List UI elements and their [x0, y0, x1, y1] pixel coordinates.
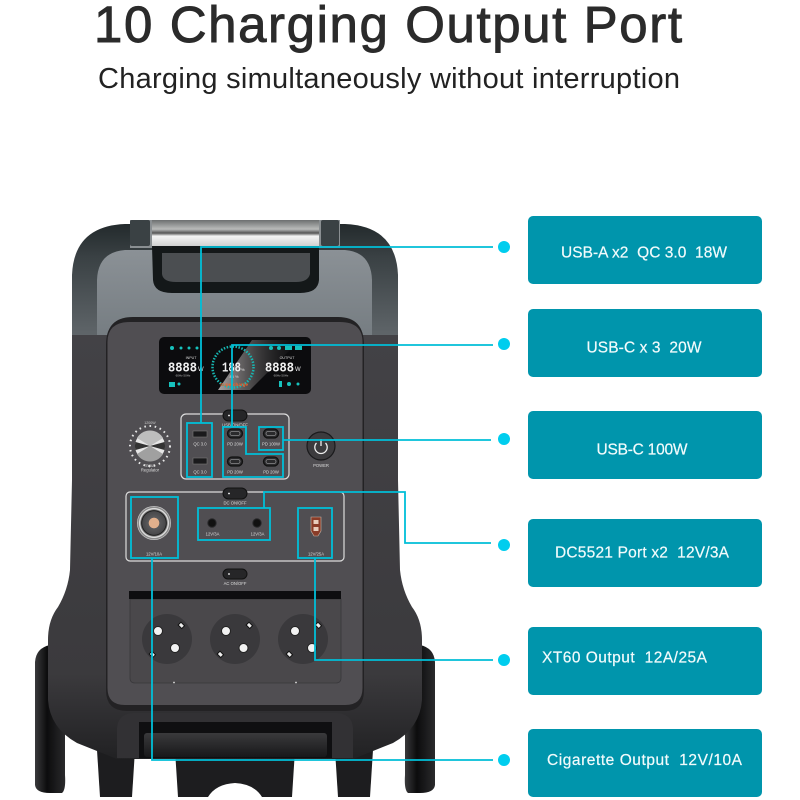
card: DC5521: DC5521 Port x2 12V/3A: [555, 544, 730, 562]
card: USB-C x3: [528, 309, 762, 377]
LCD display: [159, 337, 311, 394]
card: USB-A: USB-A x2 QC 3.0 18W: [561, 244, 727, 262]
card: USB-C 100W: [528, 411, 762, 479]
lower body: [48, 330, 422, 759]
socket 1: [142, 614, 192, 664]
USB port group: PD 20W: [227, 470, 243, 474]
connector: USB-C 100W: [283, 439, 491, 441]
top shell light grey: [97, 250, 372, 335]
connector box: USB-C 100W: [259, 427, 283, 450]
DC port group: [126, 488, 344, 561]
USB port group: USB ON/OFF: [222, 422, 248, 428]
card: USB-C 100W: USB-C 100W: [596, 442, 688, 458]
connector: XT60: [315, 558, 493, 660]
USB port group: QC 3.0: [193, 442, 207, 446]
connector box: XT60: [298, 508, 332, 558]
input regulator knob: 1200W: [144, 421, 156, 425]
DC port group: 12V/3A: [206, 532, 220, 536]
LCD display: 8888: [265, 360, 294, 376]
power button: [307, 432, 335, 468]
USB port group: PD 100W: [262, 442, 280, 446]
carry handle: [130, 220, 340, 293]
DC port group: 12V/3A: [251, 532, 265, 536]
bottom handle: [117, 713, 353, 758]
LCD display: 88 %: [229, 374, 239, 379]
connector box: DC5521: [198, 508, 270, 540]
LCD display: OUTPUT: [280, 356, 295, 360]
power station device: [35, 220, 435, 797]
AC outlet panel: [129, 591, 341, 683]
AC switch: [223, 569, 247, 586]
connector: DC5521: [264, 492, 491, 543]
socket 3: [278, 614, 328, 664]
card: DC5521: [528, 519, 762, 587]
USB port group: QC 3.0: [193, 470, 207, 474]
connector: cigarette: [152, 558, 493, 760]
LCD display: 188: [222, 360, 241, 376]
card: XT60: [528, 627, 762, 695]
card: XT60: XT60 Output 12A/25A: [542, 650, 708, 666]
LCD display: 60Hz 50Hz: [274, 374, 289, 378]
top shell outer rim: [72, 224, 398, 335]
connector box: USB-C 20W: [223, 427, 283, 477]
AC switch: AC ON/OFF: [224, 581, 247, 586]
USB port group: [181, 410, 289, 479]
input regulator knob: Input: [145, 463, 155, 468]
power button: POWER: [313, 463, 329, 468]
LCD display: 60Hz 50Hz: [176, 374, 191, 378]
left wheel: [35, 645, 65, 793]
input regulator knob: [130, 421, 170, 472]
connector box: USB-A: [187, 423, 212, 477]
LCD display: Supercharge: [220, 382, 248, 387]
socket 2: [210, 614, 260, 664]
card: cigarette: Cigarette Output 12V/10A: [547, 752, 743, 769]
USB port group: PD 20W: [263, 470, 279, 474]
callout connector lines: [131, 247, 493, 760]
LCD display: 8888: [168, 360, 197, 376]
LCD display: %: [241, 367, 245, 372]
card: USB-C x3: USB-C x 3 20W: [586, 340, 702, 356]
feet: [97, 750, 373, 797]
card: cigarette: [528, 729, 762, 797]
DC port group: 12V/25A: [308, 552, 324, 556]
right wheel: [405, 645, 435, 793]
input regulator knob: Regulator: [141, 468, 160, 472]
subtitle: Charging simultaneously without interruption: [98, 63, 680, 95]
LCD display: W: [198, 367, 204, 373]
LCD display: W: [295, 367, 301, 373]
DC port group: 12V/10A: [146, 552, 162, 556]
USB port group: PD 20W: [227, 442, 243, 446]
card: USB-A: [528, 216, 762, 284]
connector box: cigarette: [131, 497, 178, 558]
callout dots: [498, 241, 510, 766]
connector: USB-A: [201, 247, 493, 423]
front panel: [106, 317, 364, 711]
LCD display: INPUT: [186, 356, 197, 360]
connector: USB-C 20W: [232, 345, 493, 427]
DC port group: DC ON/OFF: [223, 500, 247, 506]
